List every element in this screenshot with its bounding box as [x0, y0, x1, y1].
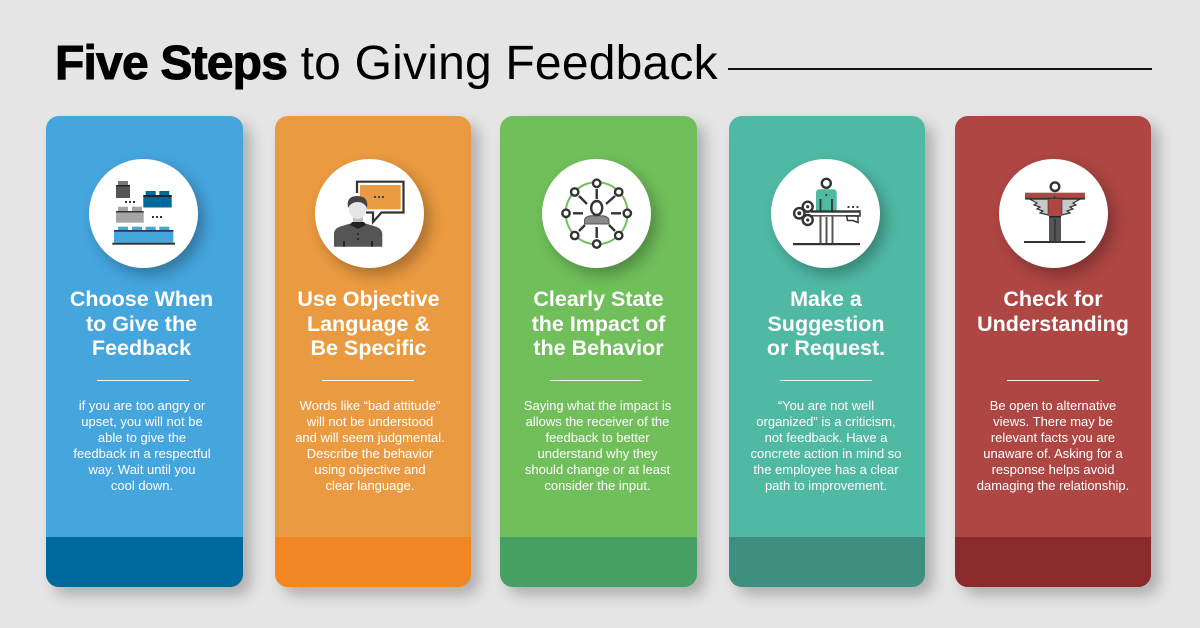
- body text: Saying what the impact is: [524, 398, 671, 413]
- heading: Make a: [790, 287, 862, 311]
- heading: the Behavior: [533, 336, 664, 360]
- body text: relevant facts you are: [991, 430, 1115, 445]
- icon: person with speech bubble: [315, 159, 424, 268]
- body text: views. There may be: [993, 414, 1113, 429]
- icon: person with key: [771, 159, 880, 268]
- body text: Describe the behavior: [307, 446, 433, 461]
- body text: “You are not well: [778, 398, 874, 413]
- heading: the Impact of: [532, 312, 665, 336]
- panel footer band: [729, 537, 925, 587]
- body text: way. Wait until you: [89, 462, 195, 477]
- heading: Suggestion: [767, 312, 885, 336]
- body text: the employee has a clear: [753, 462, 899, 477]
- heading: [297, 287, 440, 360]
- body text: understand why they: [538, 446, 657, 461]
- body text: [295, 398, 445, 493]
- body text: allows the receiver of the: [526, 414, 669, 429]
- body text: Words like “bad attitude”: [300, 398, 440, 413]
- body text: organized” is a criticism,: [756, 414, 896, 429]
- body text: response helps avoid: [992, 462, 1114, 477]
- heading: [532, 287, 666, 360]
- heading: [70, 287, 213, 360]
- heading: to Give the: [86, 312, 197, 336]
- heading: Understanding: [977, 312, 1129, 336]
- body text: if you are too angry or: [79, 398, 205, 413]
- panel footer band: [500, 537, 697, 587]
- body text: and will seem judgmental.: [295, 430, 445, 445]
- heading: Check for: [1003, 287, 1103, 311]
- body text: cool down.: [111, 478, 173, 493]
- title: Five Steps to Giving Feedback: [55, 37, 718, 90]
- panel: step 4 suggestion: [729, 116, 925, 587]
- body text: concrete action in mind so: [750, 446, 902, 461]
- body text: clear language.: [326, 478, 414, 493]
- body text: not feedback. Have a: [765, 430, 887, 445]
- body text: should change or at least: [525, 462, 670, 477]
- body text: [977, 398, 1129, 493]
- body text: will not be understood: [307, 414, 433, 429]
- panel: step 1 choose when: [46, 116, 243, 587]
- panel footer band: [275, 537, 471, 587]
- body text: upset, you will not be: [81, 414, 203, 429]
- body text: unaware of. Asking for a: [983, 446, 1123, 461]
- heading: Be Specific: [311, 336, 426, 360]
- body text: Be open to alternative: [990, 398, 1116, 413]
- heading: or Request.: [767, 336, 885, 360]
- body text: [524, 398, 671, 493]
- icon: person network: [542, 159, 651, 268]
- panel: step 5 check understanding: [955, 116, 1151, 587]
- panel footer band: [46, 537, 243, 587]
- body text: [73, 398, 211, 493]
- body text: feedback to better: [545, 430, 650, 445]
- heading: Choose When: [70, 287, 213, 311]
- body text: feedback in a respectful: [73, 446, 211, 461]
- icon: building blocks: [89, 159, 198, 268]
- panel footer band: [955, 537, 1151, 587]
- panel: step 3 state the impact: [500, 116, 697, 587]
- body text: using objective and: [314, 462, 426, 477]
- body text: path to improvement.: [765, 478, 887, 493]
- heading: Use Objective: [297, 287, 440, 311]
- body text: [750, 398, 902, 493]
- body text: consider the input.: [544, 478, 651, 493]
- body text: able to give the: [98, 430, 186, 445]
- body text: damaging the relationship.: [977, 478, 1129, 493]
- heading: Clearly State: [533, 287, 664, 311]
- heading: [767, 287, 885, 360]
- heading: [977, 287, 1129, 336]
- panel: step 2 objective language: [275, 116, 471, 587]
- heading: Feedback: [92, 336, 191, 360]
- heading: Language &: [307, 312, 430, 336]
- icon: winged person: [999, 159, 1108, 268]
